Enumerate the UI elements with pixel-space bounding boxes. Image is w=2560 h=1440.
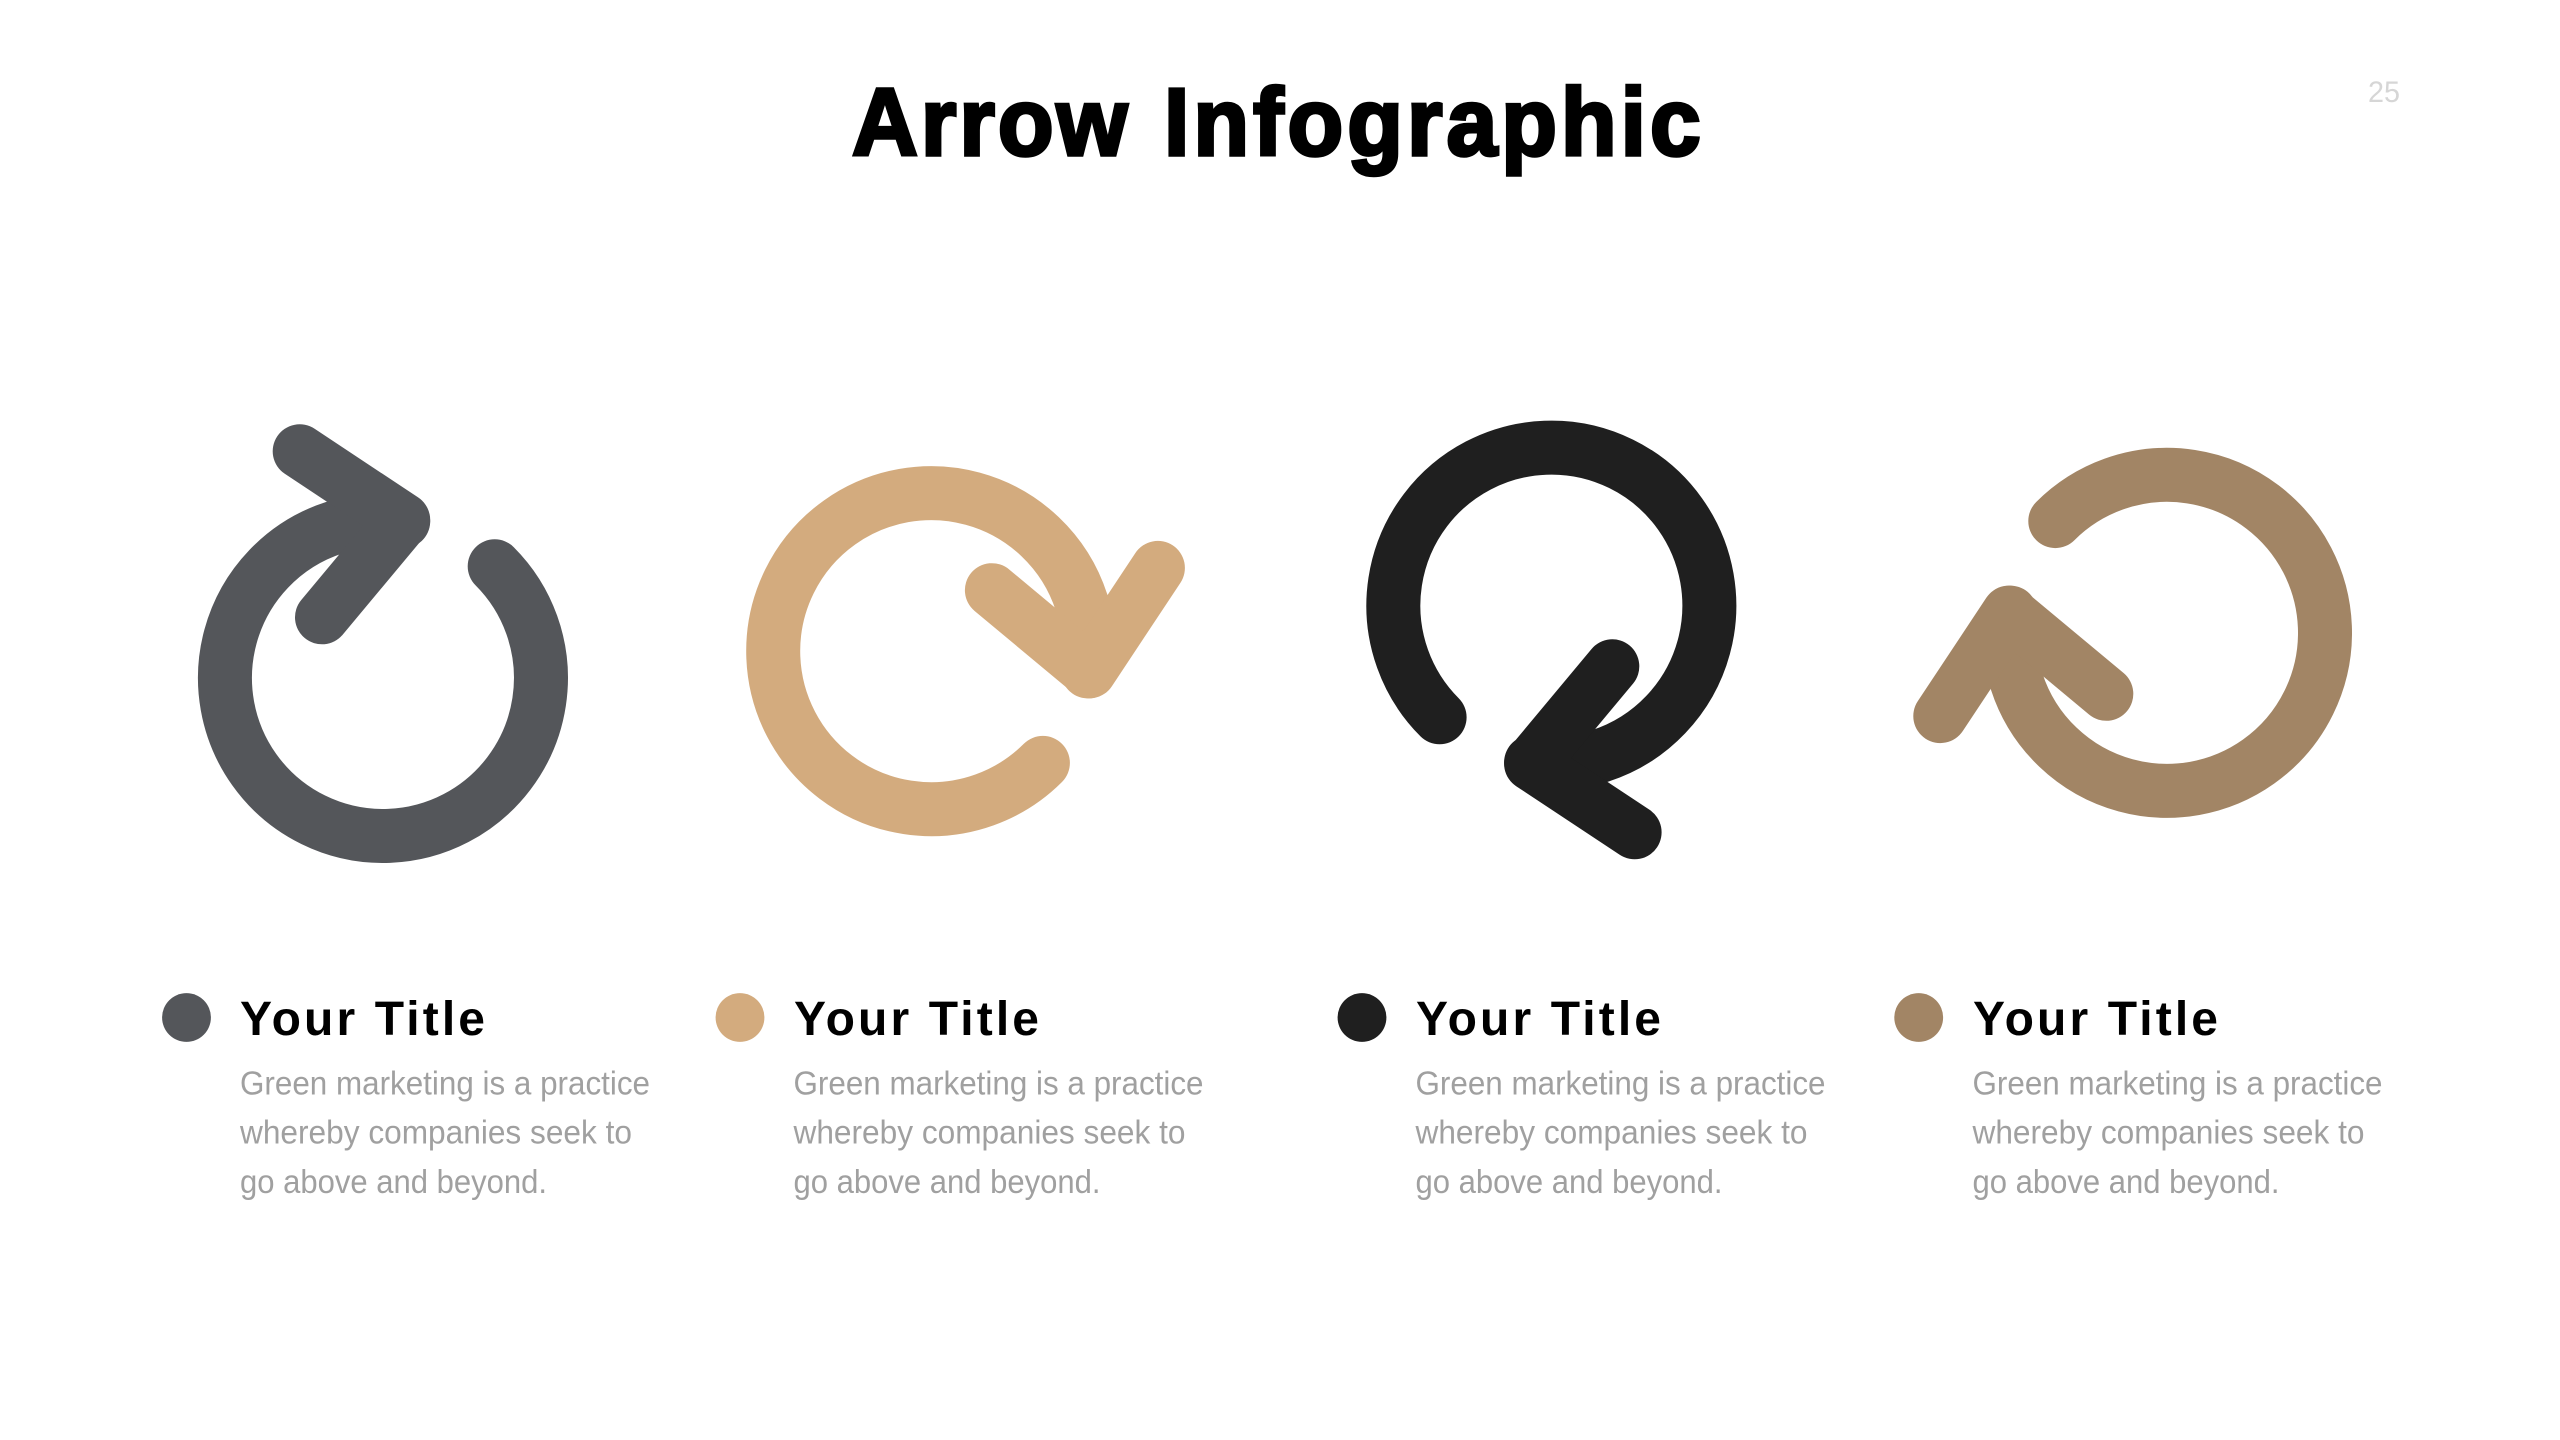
text block: black column: whereby companies seek to	[1415, 1114, 1808, 1150]
page number: 25	[2368, 76, 2400, 109]
marker dot: gray	[162, 993, 211, 1042]
marker dot: black	[1338, 993, 1386, 1042]
text block: gray column: go above and beyond.	[240, 1163, 547, 1200]
icon: tan circular arrow	[773, 493, 1158, 809]
text block: brown column: Green marketing is a practice	[1972, 1064, 2382, 1102]
text block: brown column: go above and beyond.	[1972, 1163, 2280, 1200]
text block: tan column: go above and beyond.	[794, 1163, 1100, 1200]
icon: gray circular arrow	[225, 451, 541, 836]
panel: brown column	[1894, 475, 2382, 1200]
text block: gray column: whereby companies seek to	[239, 1114, 632, 1150]
icon: brown circular arrow	[1940, 475, 2325, 791]
title: Infographic	[1164, 68, 1701, 176]
text block: black column: go above and beyond.	[1416, 1163, 1722, 1200]
panel: tan column	[716, 493, 1204, 1200]
panel: gray column	[162, 451, 650, 1200]
text block: black column	[1415, 1064, 1826, 1200]
heading: brown column: Your Title	[1973, 993, 2218, 1046]
text block: tan column	[793, 1064, 1204, 1200]
icon: black circular arrow	[1393, 448, 1709, 832]
text block: tan column: whereby companies seek to	[793, 1114, 1186, 1150]
text block: black column: Green marketing is a practice	[1416, 1064, 1826, 1102]
marker dot: brown	[1894, 993, 1943, 1042]
text block: gray column: Green marketing is a practice	[240, 1064, 650, 1102]
heading: black column: Your Title	[1416, 993, 1661, 1046]
panel: black column	[1338, 448, 1826, 1200]
heading: tan column: Your Title	[794, 993, 1039, 1046]
text block: brown column: whereby companies seek to	[1972, 1114, 2364, 1150]
heading: gray column: Your Title	[240, 993, 485, 1046]
title	[852, 68, 1701, 176]
marker dot: tan	[716, 993, 764, 1042]
text block: brown column	[1972, 1064, 2382, 1200]
text block: gray column	[239, 1064, 650, 1200]
title: Arrow	[852, 68, 1128, 176]
text block: tan column: Green marketing is a practice	[794, 1064, 1204, 1102]
